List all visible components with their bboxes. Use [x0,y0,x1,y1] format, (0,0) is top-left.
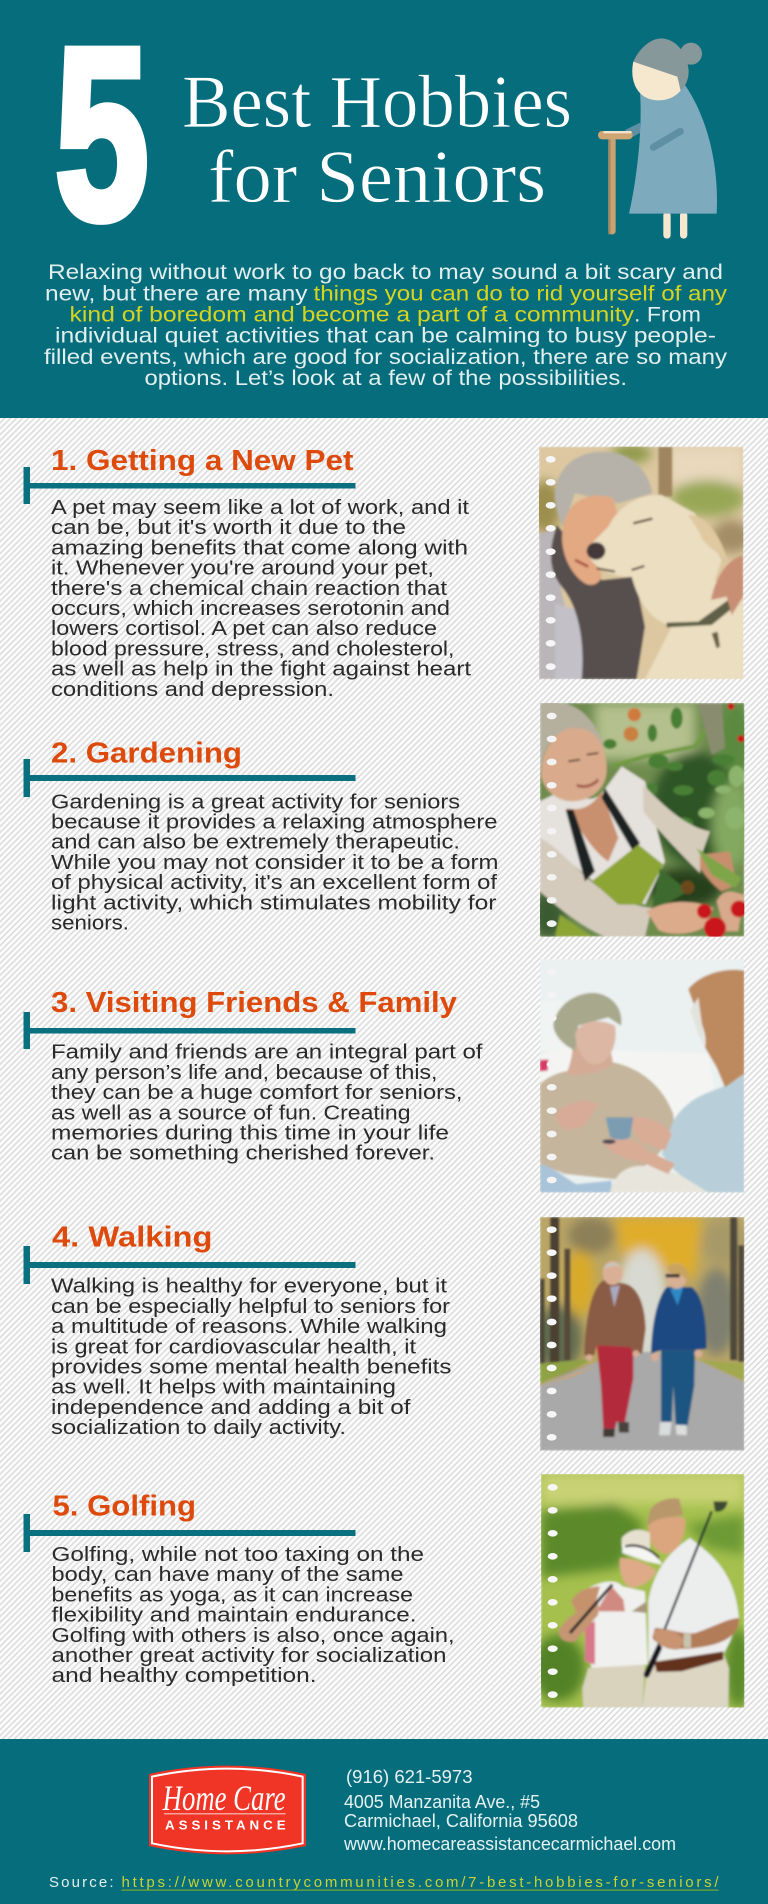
big number 5: 5 [55,0,149,270]
heading: 1. Getting a New Pet [51,445,354,477]
photo: woman hugging dog [528,443,752,679]
panel: header [0,0,768,418]
photo: golfing couple [532,1474,752,1708]
body text: Family and friends are an integral part of [51,1041,483,1064]
intro paragraph: filled events, which are good for socialization, there are so many [44,345,727,369]
body text: blood pressure, stress, and cholesterol, [51,637,454,660]
panel: 3. Visiting Friends & Family [24,959,744,1193]
body text: another great activity for socialization [52,1644,446,1667]
body text: Gardening is a great activity for seniors [51,790,460,813]
binder holes [546,456,556,670]
body text: they can be a huge comfort for seniors, [51,1081,462,1104]
body text: seniors. [51,912,129,934]
photo: woman picking tomatoes [532,702,752,939]
title: Best Hobbies [182,61,572,144]
heading: 3. Visiting Friends & Family [51,987,457,1019]
icon: senior woman with cane [598,38,717,239]
panel: 5. Golfing [24,1474,752,1708]
body text: benefits as yoga, as it can increase [52,1583,413,1606]
body text: and healthy competition. [52,1664,316,1687]
contact details: Carmichael, California 95608 [344,1810,578,1831]
heading rule [24,759,356,797]
body text [51,790,498,934]
binder holes [546,1016,557,1184]
body text: amazing benefits that come along with [51,536,468,559]
body text: provides some mental health benefits [51,1356,452,1378]
body text: a multitude of reasons. While walking [51,1315,447,1338]
body text [51,1041,483,1165]
body text: any person’s life and, because of this, [51,1061,438,1084]
body text: as well as a source of fun. Creating [51,1101,411,1124]
body text: Golfing, while not too taxing on the [52,1543,424,1566]
intro paragraph: kind of boredom and become a part of a community [70,303,634,327]
contact details: (916) 621-5973 [346,1766,472,1787]
binder holes [547,1226,557,1441]
body text: memories during this time in your life [51,1122,449,1144]
body text: While you may not consider it to be a form [51,851,498,874]
panel: 1. Getting a New Pet [24,443,752,701]
heading rule [24,1514,356,1552]
body text: can be, but it's worth it due to the [51,516,406,539]
panel: 4. Walking [24,1217,748,1451]
logo: Home Care Assistance [149,1766,306,1854]
intro paragraph: things you can do to rid yourself of any [314,282,727,306]
body text: there's a chemical chain reaction that [51,577,447,600]
title [182,61,572,219]
body text: A pet may seem like a lot of work, and it [51,496,469,519]
intro paragraph: new, but there are many [45,282,308,306]
body text: lowers cortisol. A pet can also reduce [51,617,437,640]
body text: it. Whenever you're around your pet, [51,557,434,580]
photo: friends talking over coffee [540,959,744,1193]
body text: Golfing with others is also, once again, [52,1624,455,1647]
source line: https://www.countrycommunities.com/7-best-hobbies-for-seniors/ [122,1874,719,1891]
photo: couple walking in park [535,1217,748,1451]
body text [51,1275,452,1439]
body text: of physical activity, it's an excellent form of [51,871,497,894]
heading: 2. Gardening [51,738,242,770]
logo: Home Care Assistance: Home Care [162,1778,286,1818]
body text: occurs, which increases serotonin and [51,597,450,620]
heading: 5. Golfing [52,1491,196,1523]
body text: can be something cherished forever. [51,1142,435,1165]
binder holes [548,1484,558,1698]
intro paragraph: individual quiet activities that can be calming to busy people- [55,324,716,348]
intro paragraph: . From [634,303,701,327]
panel: footer [0,1739,768,1904]
binder holes [547,713,557,927]
body text: conditions and depression. [51,678,334,701]
logo: Home Care Assistance: ASSISTANCE [165,1817,286,1832]
body text [51,496,471,701]
heading: 4. Walking [52,1222,212,1254]
body text: socialization to daily activity. [51,1416,346,1439]
body text: as well. It helps with maintaining [51,1376,396,1399]
contact details: 4005 Manzanita Ave., #5 [344,1791,540,1812]
heading rule [24,1246,356,1284]
body text: and can also be extremely therapeutic. [51,831,460,854]
heading rule [24,1012,356,1049]
intro paragraph: Relaxing without work to go back to may sound a bit scary and [48,260,723,284]
body text: because it provides a relaxing atmosphere [51,810,498,834]
body text: flexibility and maintain endurance. [52,1604,416,1627]
body text: independence and adding a bit of [51,1396,411,1419]
body text: as well as help in the fight against heart [51,658,471,681]
title: for Seniors [208,136,546,219]
intro paragraph [44,260,727,390]
intro paragraph: options. Let’s look at a few of the possibilities. [144,366,627,390]
heading rule [24,467,356,504]
body text: can be especially helpful to seniors for [51,1295,450,1318]
body text: is great for cardiovascular health, it [51,1335,416,1358]
body text: body, can have many of the same [52,1563,404,1586]
body text [52,1543,455,1687]
contact details: www.homecareassistancecarmichael.com [343,1833,676,1854]
body text: Walking is healthy for everyone, but it [51,1275,447,1298]
source line: Source: [49,1874,114,1891]
contact details [343,1766,676,1854]
body text: light activity, which stimulates mobility for [51,891,497,914]
panel: 2. Gardening [24,702,752,939]
